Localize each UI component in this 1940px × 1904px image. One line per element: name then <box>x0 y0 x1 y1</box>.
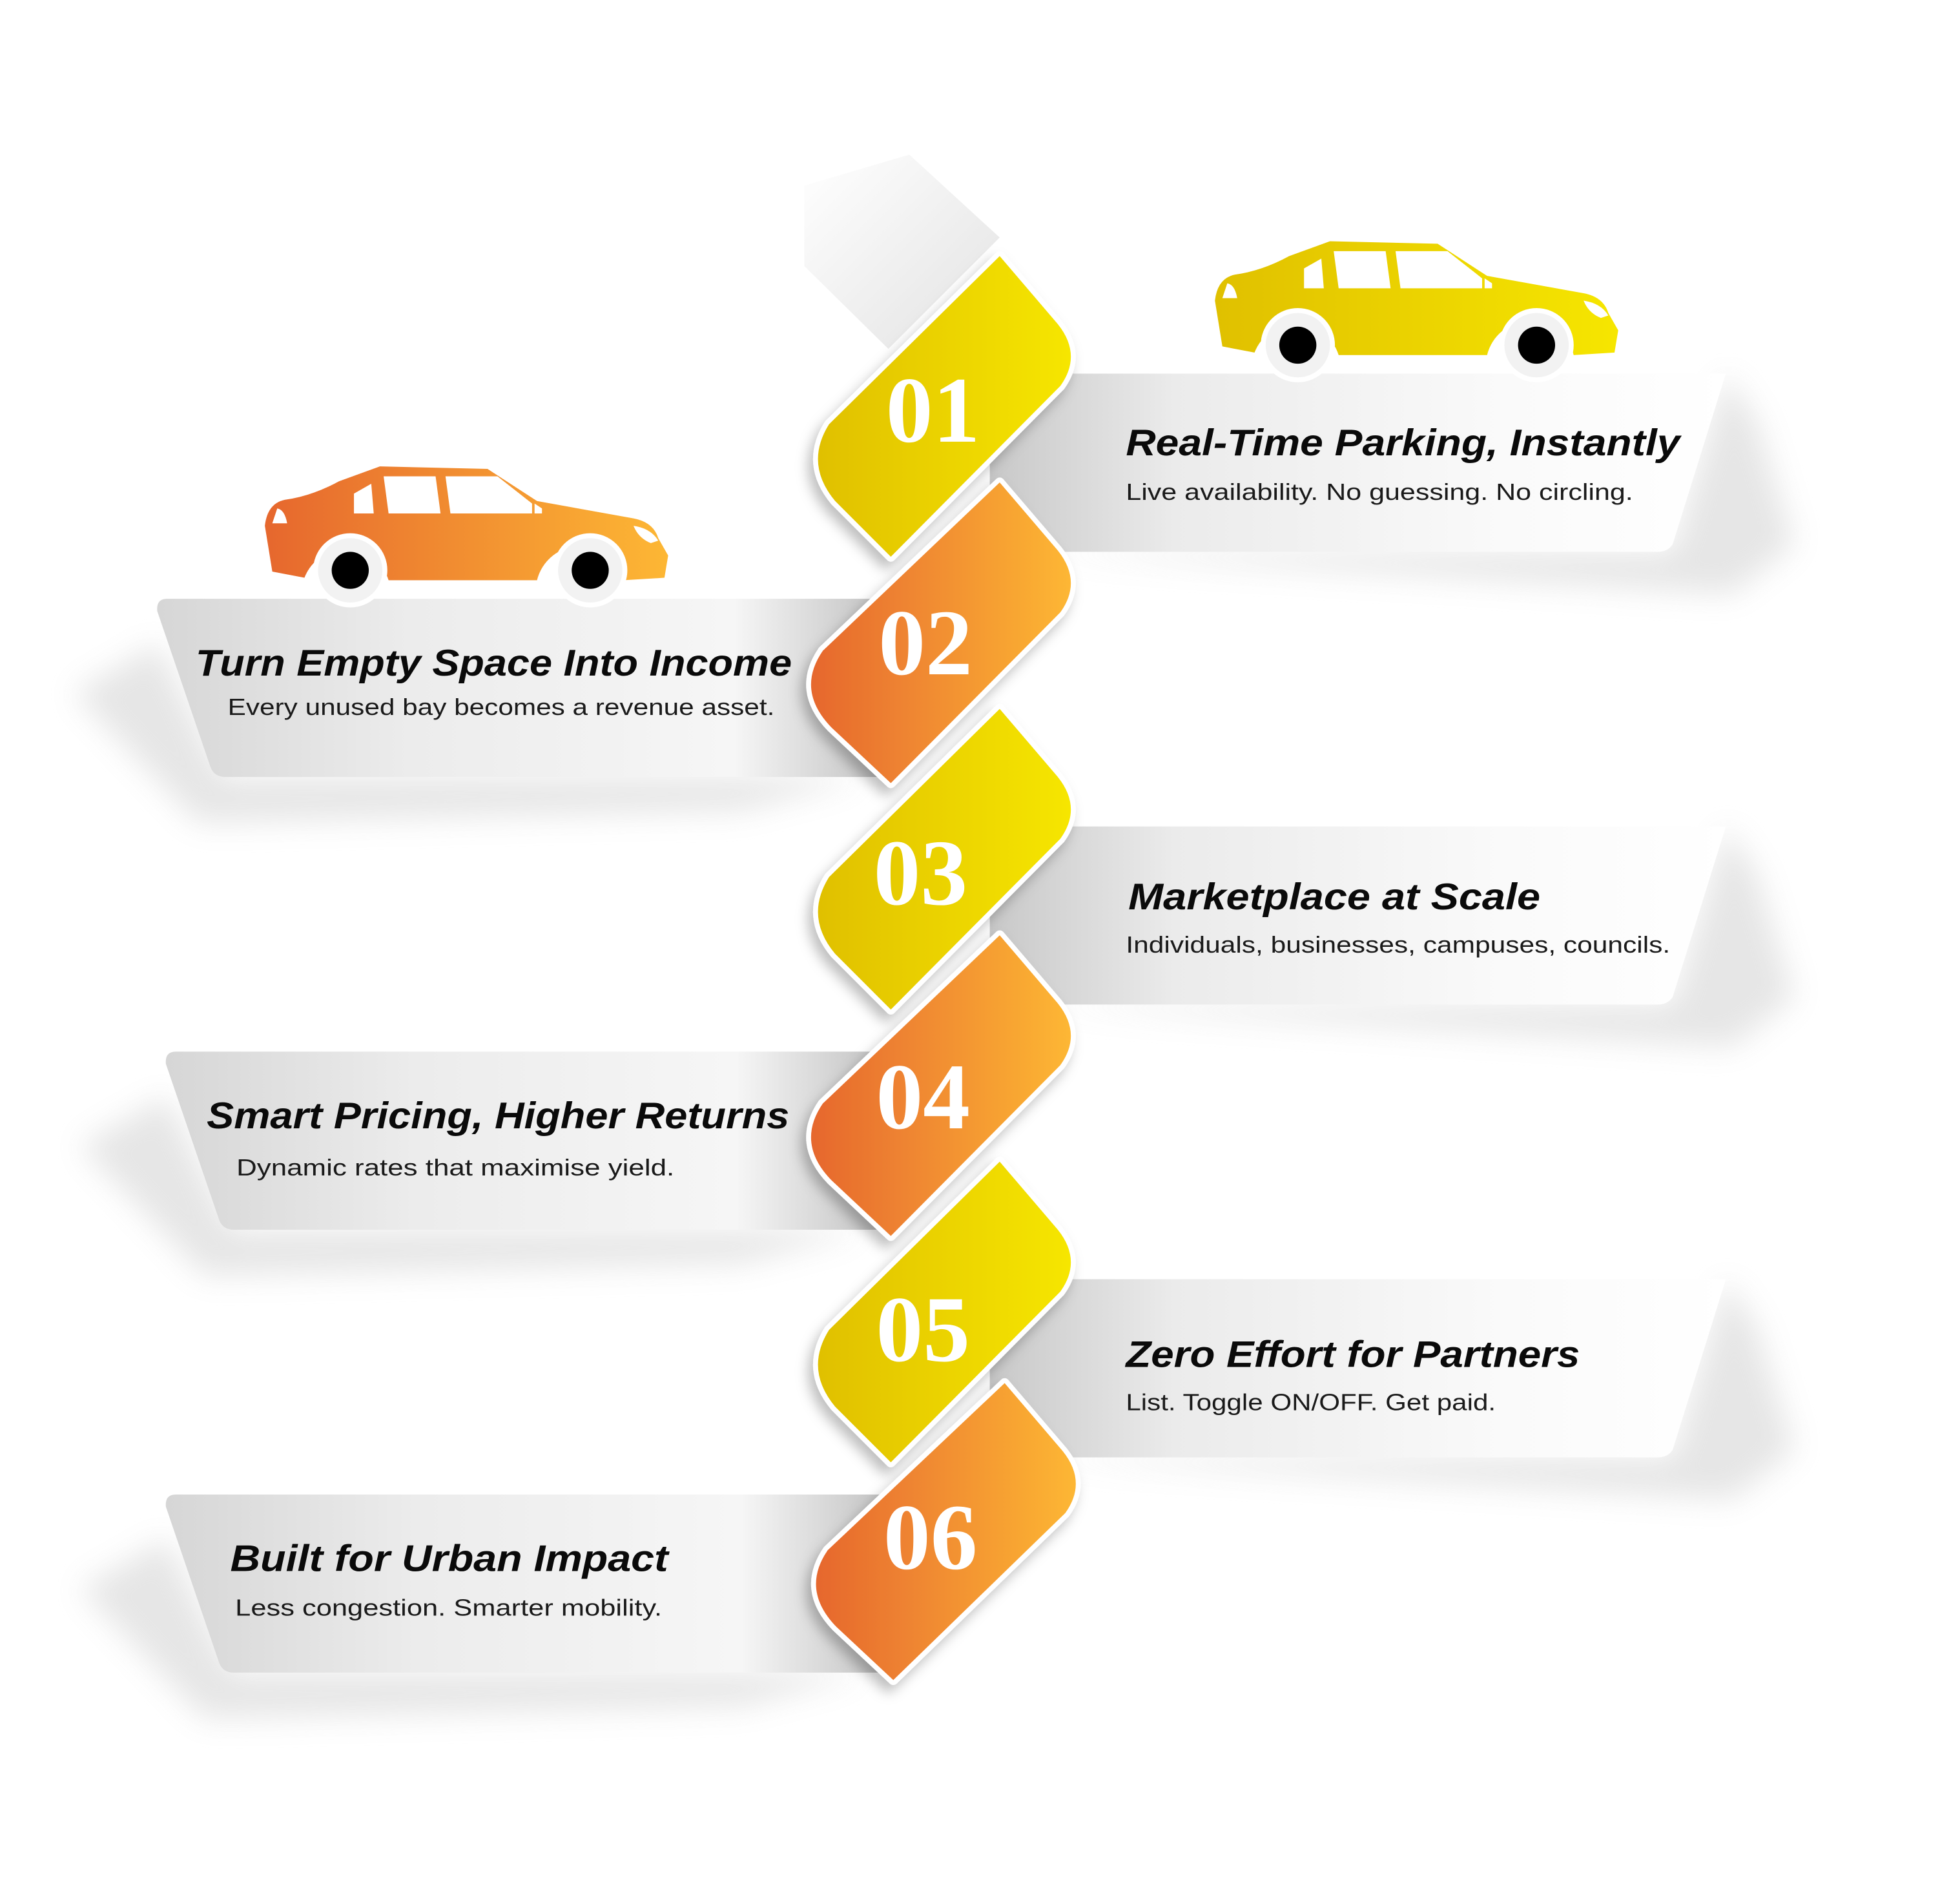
panel 04 <box>81 1051 878 1276</box>
panel 06 <box>81 1495 885 1719</box>
panel 06: Less congestion. Smarter mobility. <box>235 1595 662 1621</box>
panel 05: Zero Effort for Partners <box>1124 1334 1580 1376</box>
panel 05: List. Toggle ON/OFF. Get paid. <box>1126 1389 1496 1416</box>
panel 01: Live availability. No guessing. No circling. <box>1126 479 1633 505</box>
diamond 02 <box>811 482 1071 783</box>
icon: orange car <box>265 466 668 605</box>
top decorative ribbon <box>804 154 1000 349</box>
diamond 06: 06 <box>883 1485 977 1589</box>
panel 01: Real-Time Parking, Instantly <box>1126 422 1682 464</box>
diamond 02: 02 <box>878 591 973 695</box>
diamond 04: 04 <box>876 1045 970 1149</box>
diamond 06 <box>816 1383 1076 1680</box>
panel 02: Turn Empty Space Into Income <box>196 643 792 684</box>
panel 02 <box>74 599 878 823</box>
diamond 05 <box>818 1162 1071 1462</box>
diamond 01: 01 <box>886 358 980 462</box>
panel 03: Marketplace at Scale <box>1128 876 1540 918</box>
diamond 01 <box>818 256 1071 557</box>
panel 02: Every unused bay becomes a revenue asset. <box>228 694 774 720</box>
panel 04: Dynamic rates that maximise yield. <box>236 1154 674 1181</box>
diamond 03: 03 <box>874 821 967 925</box>
diamond 05: 05 <box>876 1278 970 1381</box>
diamond 03 <box>818 709 1071 1009</box>
panel 03: Individuals, businesses, campuses, councils. <box>1126 931 1670 958</box>
panel 05 <box>990 1279 1794 1500</box>
panel 01 <box>990 373 1794 594</box>
panel 04: Smart Pricing, Higher Returns <box>207 1095 789 1137</box>
diamond 04 <box>811 935 1071 1236</box>
icon: yellow car <box>1215 242 1618 380</box>
panel 06: Built for Urban Impact <box>231 1538 670 1580</box>
panel 03 <box>990 827 1794 1047</box>
